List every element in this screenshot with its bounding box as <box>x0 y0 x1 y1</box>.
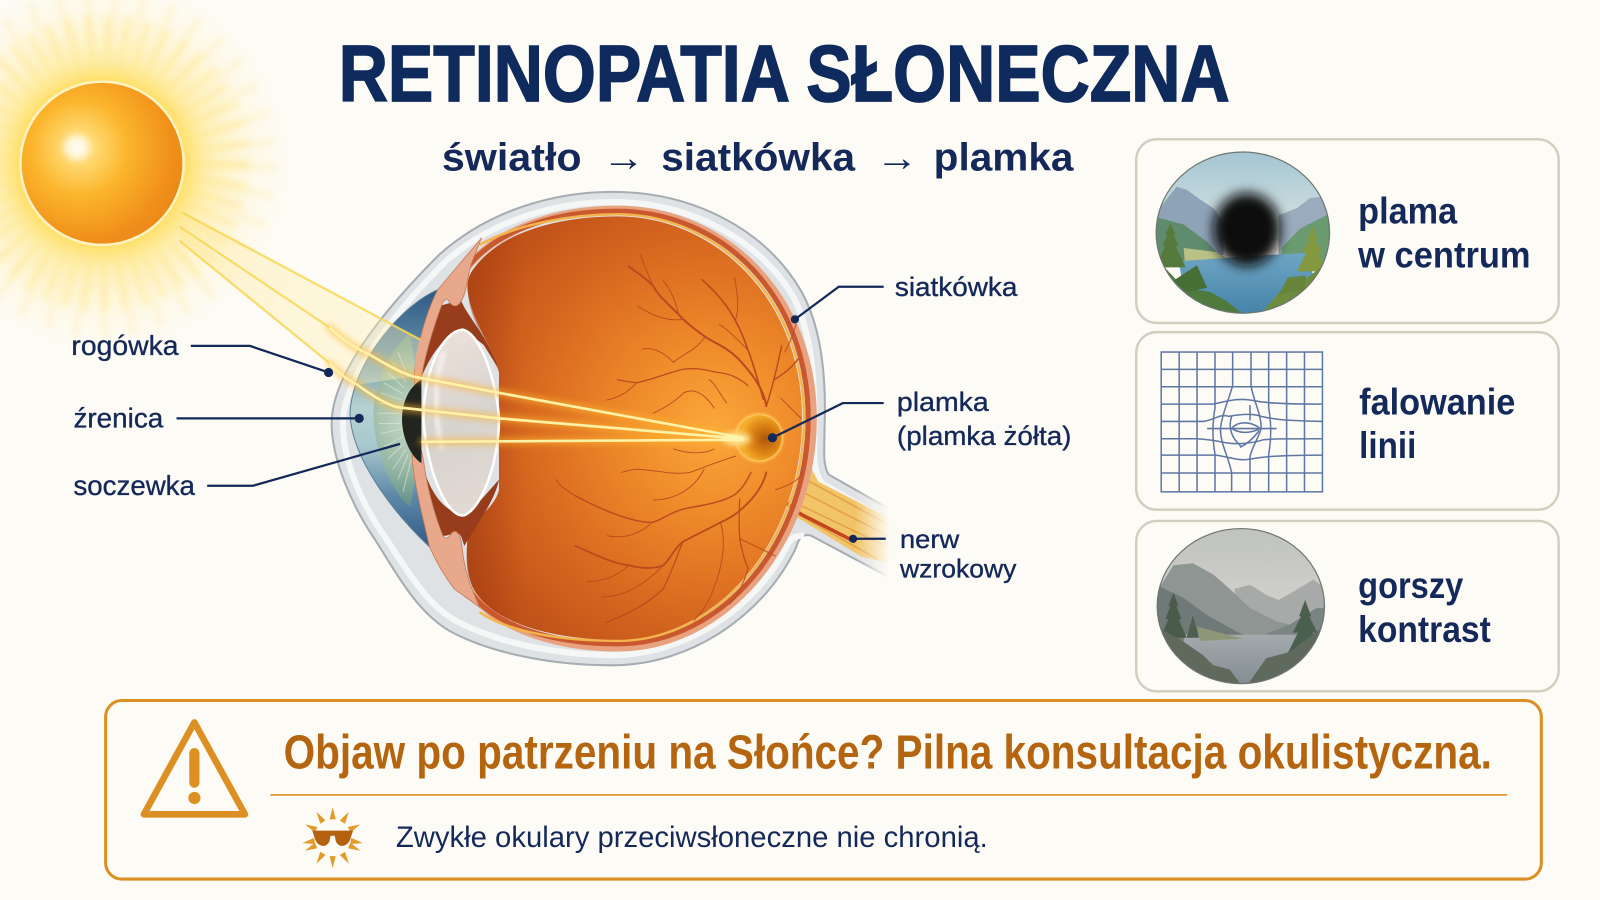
panel: gorszy kontrast: kontrast <box>1358 609 1491 650</box>
subtitle: siatkówka <box>661 136 856 179</box>
label: plamka: (plamka żółta) <box>897 421 1071 451</box>
subtitle <box>442 136 1074 179</box>
label: nerw wzrokowy: nerw <box>900 526 960 554</box>
panel: falowanie linii <box>1136 332 1559 510</box>
label: rogówka: rogówka <box>71 330 179 361</box>
zonules upper <box>420 301 499 380</box>
sun highlight <box>63 135 88 159</box>
sun disc <box>20 82 184 245</box>
label: nerw wzrokowy <box>849 526 1017 584</box>
ciliary body lower <box>412 447 480 607</box>
warning frame <box>106 701 1541 879</box>
retinal vessels <box>556 255 802 622</box>
nerve central vessel <box>768 472 855 542</box>
lens body <box>423 330 499 515</box>
convergence glow <box>722 433 751 445</box>
lens highlight <box>436 352 444 449</box>
iris green <box>373 333 420 507</box>
label: plamka <box>768 387 1071 451</box>
leader plamka <box>772 403 884 438</box>
warning note: Zwykłe okulary przeciwsłoneczne nie chronią. <box>396 821 988 854</box>
card text: falowanie <box>1359 381 1515 422</box>
sun glow <box>0 0 306 367</box>
panel: gorszy kontrast <box>1136 521 1559 691</box>
leader źrenica <box>177 417 359 419</box>
low-contrast scene <box>1158 529 1324 683</box>
macula <box>735 413 784 462</box>
label: soczewka: soczewka <box>73 470 196 501</box>
anterior chamber <box>350 290 440 547</box>
anterior chamber and iris <box>350 290 440 547</box>
label: źrenica: źrenica <box>73 403 164 434</box>
icon: sun with sunglasses <box>302 807 363 868</box>
leader siatkówka <box>795 287 884 319</box>
panel: falowanie linii: linii <box>1359 425 1416 466</box>
card frame <box>1136 139 1559 323</box>
sclera inner highlight <box>343 202 878 655</box>
subtitle: → <box>876 136 918 179</box>
card text: gorszy <box>1358 565 1464 606</box>
macula centre <box>737 415 782 460</box>
subtitle: → <box>602 136 645 179</box>
panel: plama w centrum <box>1136 139 1559 323</box>
subtitle: światło <box>442 136 582 179</box>
label: źrenica <box>73 403 364 434</box>
nerve fade <box>855 490 894 592</box>
subtitle: plamka <box>934 136 1074 179</box>
sun <box>0 0 306 367</box>
ciliary body upper <box>414 238 482 395</box>
icon: warning triangle <box>144 722 245 814</box>
iris fibres <box>378 352 411 492</box>
light beam from sun to eye <box>180 212 420 385</box>
ray core <box>330 328 743 442</box>
sun rays <box>0 26 240 301</box>
label: siatkówka <box>791 272 1018 323</box>
label: soczewka <box>73 444 400 501</box>
label: plamka: plamka <box>897 387 989 417</box>
leader rogówka <box>191 346 329 372</box>
warning divider <box>270 794 1507 796</box>
sclera outer wall <box>332 192 890 665</box>
leader nerw <box>853 538 886 540</box>
pupil <box>402 380 421 463</box>
eye cross-section <box>180 192 894 665</box>
retina and choroid layers <box>467 209 813 648</box>
optic nerve <box>768 457 894 592</box>
leader soczewka <box>207 444 400 486</box>
label: rogówka <box>71 330 333 377</box>
vitreous body <box>467 216 802 640</box>
incoming beam edges <box>180 212 420 363</box>
vitreous shading <box>466 230 522 624</box>
lens <box>423 330 499 515</box>
panel: warning <box>106 701 1541 879</box>
title: RETINOPATIA SŁONECZNA <box>339 29 1230 118</box>
scene with central scotoma <box>1153 149 1333 316</box>
card frame <box>1136 332 1559 510</box>
distorted Amsler grid <box>1161 352 1322 492</box>
ray glow <box>330 328 743 442</box>
nerve fibres <box>792 457 890 563</box>
label: nerw wzrokowy: wzrokowy <box>899 556 1017 584</box>
card frame <box>1136 521 1559 691</box>
label: siatkówka: siatkówka <box>895 272 1018 302</box>
panel: plama w centrum: w centrum <box>1357 234 1531 275</box>
refracted light rays <box>330 328 751 445</box>
macula ring <box>735 413 784 462</box>
card text: plama <box>1358 190 1458 231</box>
zonules lower <box>424 471 499 546</box>
